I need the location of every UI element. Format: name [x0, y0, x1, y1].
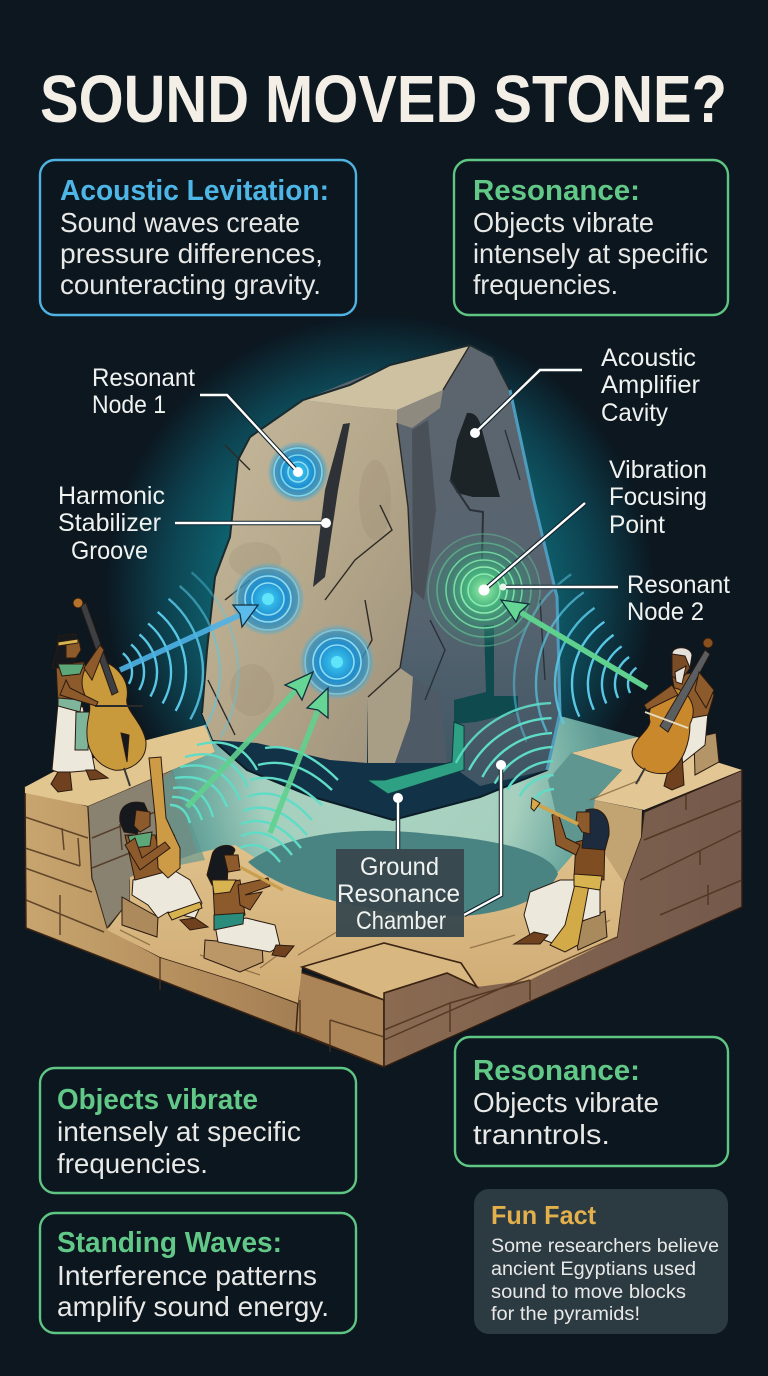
foot	[514, 932, 548, 944]
leader: resonant node 1	[200, 395, 303, 477]
leader: vibration point	[478, 503, 585, 596]
blue sound waves right	[470, 506, 768, 862]
lower grey chunk	[395, 677, 447, 763]
hair	[582, 809, 609, 850]
heading: resonance lower: Resonance:	[473, 1055, 640, 1087]
text: resonance body: intensely at specific	[473, 238, 708, 269]
face	[576, 812, 590, 834]
flute	[240, 867, 283, 890]
text: acoustic levitation body	[60, 207, 323, 300]
heading: objects vibrate: Objects vibrate	[57, 1084, 258, 1116]
label: resonant node 1: Resonant	[92, 364, 195, 392]
panel: standing waves	[40, 1213, 356, 1333]
leader: groove	[175, 518, 331, 528]
legs and feet	[51, 770, 108, 792]
arrow: blue to left node	[120, 605, 258, 670]
panel: objects vibrate	[40, 1068, 356, 1193]
trumpet bell	[531, 798, 540, 811]
torso	[672, 672, 714, 720]
torso	[213, 880, 245, 925]
trumpet	[534, 803, 578, 824]
front block face	[296, 972, 384, 1067]
grey recess left	[88, 770, 205, 928]
headband	[58, 639, 78, 646]
head	[672, 650, 690, 682]
skirt	[672, 712, 708, 765]
figure: double bass player	[51, 598, 146, 792]
torso	[56, 662, 94, 704]
label: resonant node 1	[92, 364, 195, 419]
right wall	[384, 770, 742, 1067]
stepped channel	[450, 480, 483, 560]
text: fun fact body: Some researchers believe	[491, 1236, 719, 1257]
label: acoustic amplifier cavity: Amplifier	[601, 371, 700, 399]
skirt	[215, 918, 280, 952]
white hair	[672, 648, 692, 684]
bow	[95, 705, 143, 707]
text: resonance lower body: Objects vibrate	[473, 1087, 659, 1118]
panel: resonance lower	[455, 1037, 728, 1166]
resonant node 1 rings	[268, 442, 328, 502]
heading: resonance: Resonance:	[473, 175, 640, 207]
leader: chamber right	[464, 760, 506, 915]
grey right face	[303, 345, 560, 786]
side shading	[412, 420, 436, 600]
blue sound waves left	[0, 489, 291, 855]
label: acoustic amplifier cavity: Cavity	[601, 399, 668, 427]
label: resonant node 1: Node 1	[92, 391, 166, 419]
heading: acoustic levitation: Acoustic Levitation:	[60, 175, 329, 207]
raised front block	[302, 943, 477, 1000]
heading: fun fact: Fun Fact	[491, 1200, 596, 1230]
bass body	[82, 660, 146, 770]
figure: flute player	[204, 845, 294, 972]
endpin	[124, 768, 130, 786]
endpin	[636, 768, 645, 784]
arm	[125, 838, 170, 870]
label: vibration focusing point: Point	[609, 511, 665, 539]
arrow: green to right node	[501, 600, 647, 688]
arms	[644, 672, 714, 710]
stool	[122, 897, 158, 937]
text: acoustic levitation body: pressure differences,	[60, 238, 323, 269]
stone monolith	[202, 345, 560, 820]
label: harmonic stabilizer groove: Groove	[71, 537, 148, 565]
text: objects vibrate body: intensely at specific	[57, 1116, 301, 1147]
stone outline	[202, 345, 510, 713]
label: acoustic amplifier cavity	[601, 344, 700, 427]
lower tan chunk	[368, 668, 413, 763]
teal sound waves trumpet	[404, 664, 706, 966]
tailpiece	[121, 733, 129, 762]
scroll	[73, 598, 83, 608]
foot	[272, 945, 294, 957]
text: fun fact body: for the pyramids!	[491, 1304, 640, 1325]
ground chamber glow channel	[367, 722, 464, 794]
left blue node rings	[232, 563, 304, 635]
arms	[60, 645, 104, 706]
arm	[552, 813, 580, 855]
top face	[303, 345, 470, 410]
skirt	[524, 880, 600, 945]
panel: fun fact	[474, 1189, 728, 1334]
teal sound waves lute	[170, 742, 257, 823]
torso	[125, 835, 165, 880]
hair	[120, 802, 148, 834]
cello body	[632, 688, 693, 774]
figure: cellist	[632, 638, 719, 790]
leader: ground chamber	[393, 793, 403, 850]
green node rings	[426, 532, 542, 648]
hair	[52, 634, 76, 668]
label: vibration focusing point: Focusing	[609, 483, 707, 511]
bass neck	[80, 603, 118, 695]
label: ground resonance chamber: Chamber	[356, 907, 446, 935]
text: resonance lower body: tranntrols.	[473, 1119, 610, 1150]
harmonic stabilizer groove	[313, 423, 350, 587]
bow	[645, 712, 688, 728]
cracks	[208, 345, 545, 735]
teal resonance channel	[454, 625, 518, 724]
left wall	[25, 787, 384, 1067]
text: standing waves body: amplify sound energy.	[57, 1291, 329, 1322]
label: ground resonance chamber: Ground	[360, 853, 439, 881]
panel: resonance top	[454, 160, 728, 315]
scroll	[703, 638, 713, 648]
leader: cavity	[470, 370, 582, 438]
text: resonance body: Objects vibrate	[473, 207, 654, 238]
soft mottling	[229, 460, 391, 716]
label: resonant node 2: Node 2	[627, 598, 704, 626]
head	[66, 640, 81, 658]
dark underside	[202, 713, 560, 820]
pale rim	[397, 390, 443, 428]
figure: trumpeter	[514, 798, 609, 952]
text: standing waves body: Interference patterns	[57, 1260, 317, 1291]
collar	[212, 880, 236, 894]
label: harmonic stabilizer groove: Harmonic	[58, 482, 165, 510]
text: resonance body: frequencies.	[473, 269, 618, 300]
dark shadow pool	[248, 831, 558, 917]
hair	[207, 845, 235, 888]
panel: acoustic levitation	[40, 160, 356, 315]
blue rim right	[510, 390, 560, 770]
text: objects vibrate body	[57, 1116, 301, 1179]
label: acoustic amplifier cavity: Acoustic	[601, 344, 696, 372]
hem and foot	[168, 902, 202, 920]
label: ground resonance chamber: Resonance	[337, 880, 460, 908]
tan front face	[202, 400, 412, 763]
label: ground resonance chamber	[336, 849, 464, 937]
lute	[149, 757, 180, 878]
text: objects vibrate body: frequencies.	[57, 1148, 208, 1179]
brick lines	[25, 795, 742, 1052]
acoustic amplifier cavity	[450, 413, 500, 497]
text: acoustic levitation body: Sound waves create	[60, 207, 300, 238]
label: resonant node 2: Resonant	[627, 571, 730, 599]
collar	[58, 664, 84, 676]
text: resonance lower body	[473, 1087, 659, 1150]
text: acoustic levitation body: counteracting gravity.	[60, 269, 321, 300]
text: fun fact body: ancient Egyptians used	[491, 1259, 696, 1280]
text: resonance body	[473, 207, 708, 300]
platform: stone base	[25, 717, 742, 1067]
belt	[214, 913, 244, 930]
stool	[694, 733, 719, 775]
face	[134, 810, 150, 832]
sash	[58, 698, 90, 750]
leg and foot	[664, 755, 684, 790]
text: fun fact body	[491, 1236, 719, 1325]
label: vibration focusing point: Vibration	[609, 456, 707, 484]
cello neck	[660, 650, 710, 732]
centre blue node rings	[300, 625, 374, 699]
label: vibration focusing point	[609, 456, 707, 539]
stool	[574, 911, 607, 950]
text: standing waves body	[57, 1260, 329, 1322]
heading: standing waves: Standing Waves:	[57, 1227, 282, 1259]
torso	[574, 835, 605, 880]
stool	[204, 940, 263, 972]
skirt	[52, 703, 95, 773]
teal lit floor	[172, 717, 637, 880]
teal sound waves flute	[240, 747, 338, 862]
sash	[574, 874, 602, 890]
face	[224, 855, 240, 872]
label: harmonic stabilizer groove	[58, 482, 165, 565]
main floor	[107, 835, 624, 1003]
arrow: green to centre node lower	[187, 672, 313, 807]
teal glow behind stone	[105, 315, 655, 865]
collar	[128, 832, 152, 848]
upper left block top	[25, 725, 215, 806]
teal tint on left recess	[152, 770, 205, 868]
leader: resonant node 2	[500, 584, 618, 590]
skirt	[132, 868, 202, 918]
right block front	[592, 800, 642, 883]
upper right block top	[571, 737, 742, 810]
arm	[238, 878, 270, 910]
figure: lute player	[120, 757, 208, 937]
teal recess right	[548, 753, 622, 852]
label: harmonic stabilizer groove: Stabilizer	[58, 509, 161, 537]
label: resonant node 2	[627, 571, 730, 626]
arrow: green to centre node upper	[270, 688, 328, 833]
gold drape	[550, 880, 590, 952]
text: fun fact body: sound to move blocks	[491, 1282, 686, 1303]
